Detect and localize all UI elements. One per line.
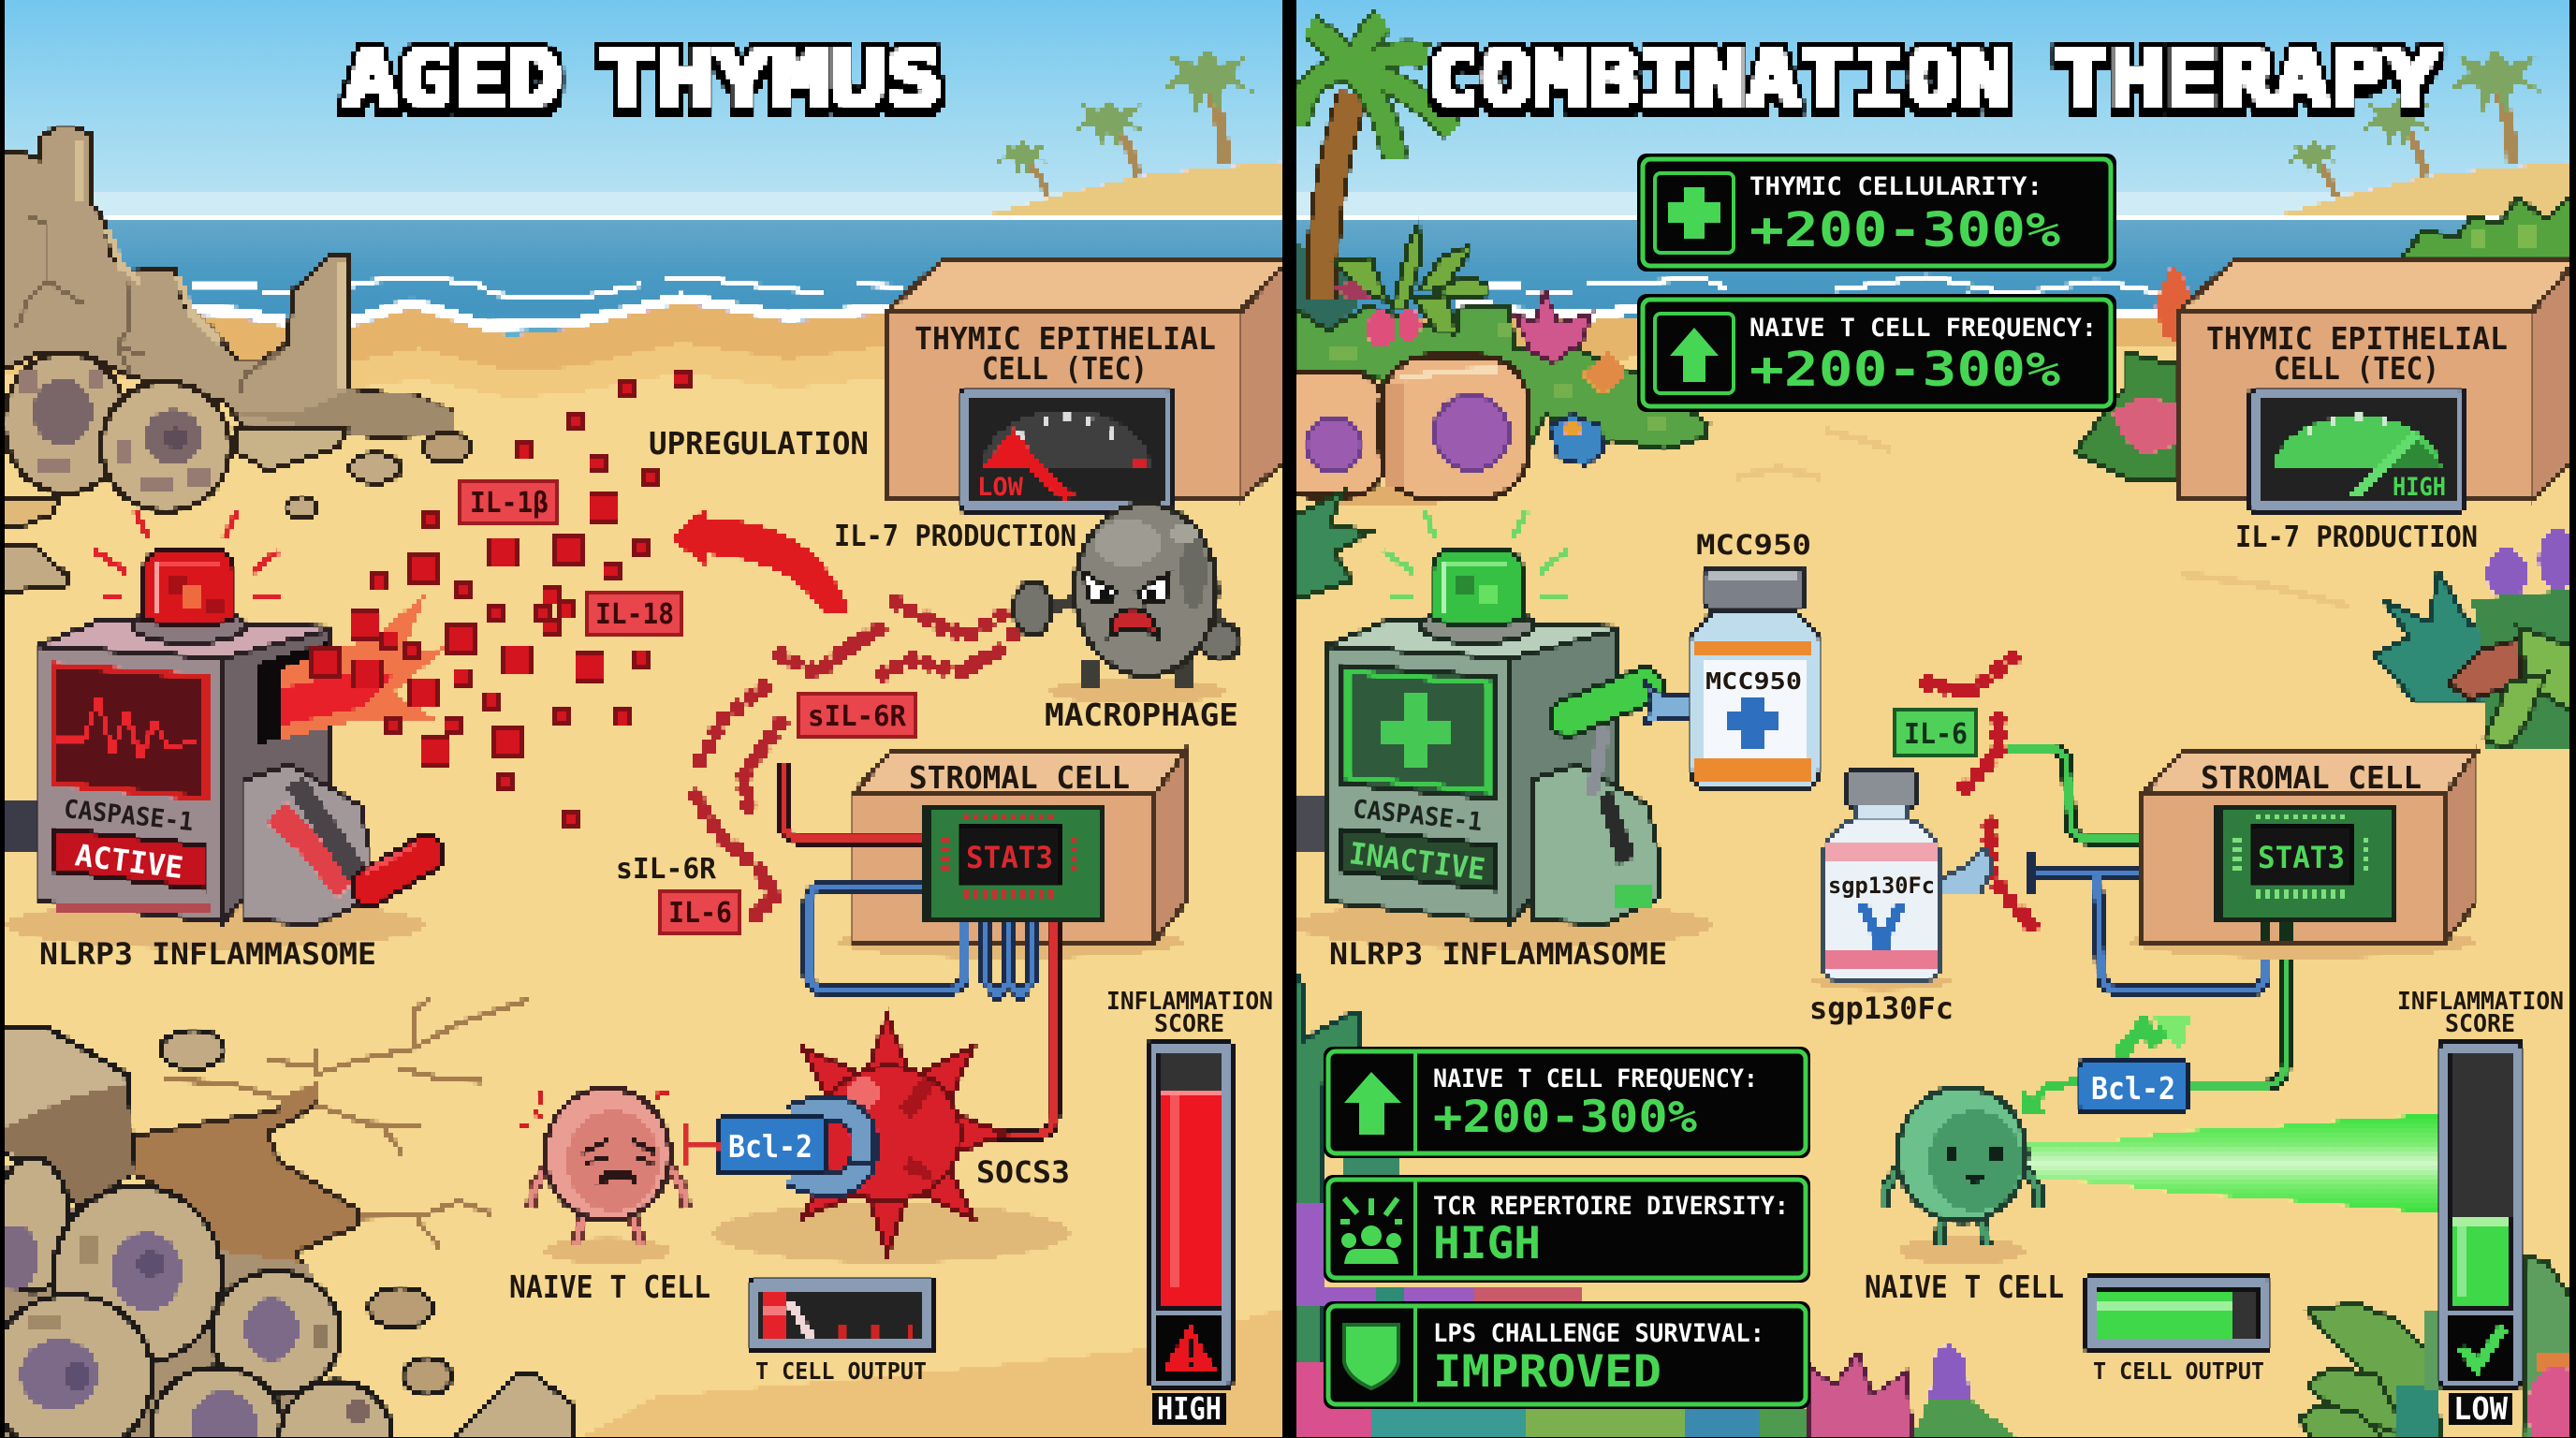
sea xyxy=(1288,220,2576,337)
foliage upper left xyxy=(1296,225,1708,465)
STAT3 circuit chip xyxy=(927,807,1104,920)
label: inflammation score: SCORE xyxy=(2445,1010,2515,1038)
sand xyxy=(0,309,1288,1438)
inflammation score bar high xyxy=(1148,1041,1232,1387)
result: TCR repertoire diversity xyxy=(1324,1175,1810,1283)
tag: IL-6: IL-6 xyxy=(668,897,732,930)
tag: sIL-6R xyxy=(798,694,915,737)
title: COMBINATION THERAPY: THERAPY xyxy=(2055,35,2440,124)
label: inflammation score: INFLAMMATION xyxy=(1106,988,1273,1016)
label: vial MCC950: MCC950 xyxy=(1705,668,1802,695)
label: naive T cell: NAIVE T CELL xyxy=(1865,1269,2064,1305)
curved red upregulation arrow xyxy=(669,506,850,615)
label: stromal cell: STROMAL CELL xyxy=(909,759,1130,796)
Bcl-2 badge xyxy=(2078,1061,2188,1113)
stromal cell box xyxy=(2130,752,2476,959)
title: AGED THYMUS: AGED xyxy=(344,35,562,124)
label: score low: LOW xyxy=(2453,1390,2508,1427)
healthy epithelial cells xyxy=(1273,356,1529,507)
foliage bottom right xyxy=(2298,1257,2576,1438)
label: caspase-1: CASPASE-1 xyxy=(63,795,195,837)
label: STAT3: STAT3 xyxy=(2258,840,2345,875)
title: AGED THYMUS: THYMUS xyxy=(598,35,944,124)
siren: red alarm xyxy=(95,510,279,643)
result: naive T cell frequency: NAIVE T CELL FREQUENCY: xyxy=(1749,314,2097,343)
label: Bcl-2: Bcl-2 xyxy=(728,1128,812,1165)
label: SOCS3: SOCS3 xyxy=(976,1154,1070,1190)
label: NLRP3 inflammasome: NLRP3 INFLAMMASOME xyxy=(39,936,376,972)
machine: NLRP3 inflammasome inactive xyxy=(1293,621,1714,949)
sand xyxy=(1288,309,2576,1438)
SOCS3 spiky ball xyxy=(712,1015,1070,1263)
label: inflammation score: SCORE xyxy=(1154,1010,1224,1038)
label: T cell output: T CELL OUTPUT xyxy=(2093,1357,2264,1385)
tag: IL-1 beta xyxy=(460,481,557,523)
stromal cell box xyxy=(838,752,1185,959)
label: MCC950: MCC950 xyxy=(1696,529,1811,561)
panel: aged thymus xyxy=(0,0,1288,1438)
siren: green calm xyxy=(1383,510,1567,643)
illustration layer: aged thymus beach scene xyxy=(0,0,1288,1438)
label: IL-7 production: IL-7 PRODUCTION xyxy=(2235,521,2478,554)
result: naive T cell frequency xyxy=(1637,294,2116,412)
cytokine particles xyxy=(311,371,689,827)
foliage upper right xyxy=(2074,197,2576,481)
ruined rocks xyxy=(0,126,452,437)
green T cell output beam xyxy=(2027,1114,2437,1213)
illustration layer: therapy beach scene xyxy=(1273,0,2576,1438)
label: T cell output: T CELL OUTPUT xyxy=(755,1357,927,1385)
label: Bcl-2: Bcl-2 xyxy=(2091,1070,2175,1107)
scattered stones lower xyxy=(161,1030,573,1438)
result: naive T cell frequency: +200-300% xyxy=(1749,343,2060,398)
result: TCR repertoire diversity: HIGH xyxy=(1433,1218,1541,1269)
TEC box xyxy=(2179,261,2576,500)
tag: IL-6 xyxy=(1895,710,1976,756)
panel: combination therapy xyxy=(1273,0,2576,1438)
result: thymic cellularity xyxy=(1637,154,2116,271)
tag: IL-6: IL-6 xyxy=(1904,718,1968,751)
result: LPS challenge survival xyxy=(1324,1301,1810,1409)
IL-6 bead chains neutralised xyxy=(1920,650,2040,933)
wiring: red and blue signalling wires xyxy=(784,763,1054,1135)
label: upregulation: UPREGULATION xyxy=(649,425,869,462)
result: LPS challenge survival: LPS CHALLENGE SURVIVAL: xyxy=(1433,1319,1764,1348)
label: thymic epithelial cell: THYMIC EPITHELIAL xyxy=(915,320,1216,357)
naive T cell (happy) xyxy=(1885,1087,2039,1265)
green arrows from Bcl-2 xyxy=(2020,1016,2190,1116)
sea xyxy=(0,220,1288,337)
tag: IL-18 xyxy=(587,593,681,635)
sky xyxy=(0,0,1288,217)
IL-6 bead chains xyxy=(688,594,1020,924)
result: thymic cellularity: THYMIC CELLULARITY: xyxy=(1749,172,2042,201)
fern left xyxy=(1296,492,1371,599)
lower left ground cracks xyxy=(134,999,531,1289)
label: IL-7 production: IL-7 PRODUCTION xyxy=(834,520,1076,553)
scattered stones upper xyxy=(0,429,471,594)
result: naive T cell frequency lower xyxy=(1324,1047,1810,1158)
machine: NLRP3 inflammasome active xyxy=(5,621,426,949)
foliage lower left xyxy=(1296,974,2019,1438)
label: active: ACTIVE xyxy=(73,837,185,886)
label: inflammation score: INFLAMMATION xyxy=(2397,988,2564,1016)
vial: MCC950 xyxy=(1690,569,1821,789)
inflammation score bar low xyxy=(2438,1041,2523,1387)
distant island with palm trees xyxy=(977,48,1288,217)
gauge: IL-7 high xyxy=(2250,389,2465,511)
tag: sIL-6R: sIL-6R xyxy=(808,700,907,733)
result: LPS challenge survival: IMPROVED xyxy=(1433,1346,1661,1398)
tag: IL-6 xyxy=(660,891,739,933)
label: gauge high: HIGH xyxy=(2393,473,2446,502)
label: macrophage: MACROPHAGE xyxy=(1045,697,1238,733)
degraded cells upper xyxy=(4,353,230,511)
result: naive T cell frequency lower: NAIVE T CELL FREQUENCY: xyxy=(1433,1064,1758,1093)
foliage right middle xyxy=(2372,528,2576,749)
label: gauge low: LOW xyxy=(977,473,1024,502)
Bcl-2 clamp xyxy=(686,1108,872,1184)
result: naive T cell frequency lower: +200-300% xyxy=(1433,1092,1697,1143)
T cell output gauge xyxy=(2086,1276,2270,1351)
vial: sgp130Fc xyxy=(1811,771,1994,990)
label: thymic epithelial cell: CELL (TEC) xyxy=(982,350,1148,387)
result: thymic cellularity: +200-300% xyxy=(1749,203,2060,258)
label: thymic epithelial cell: THYMIC EPITHELIAL xyxy=(2206,320,2508,357)
TEC box xyxy=(887,261,1288,500)
tag: IL-1 beta: IL-1β xyxy=(470,487,549,520)
distant island with palm trees xyxy=(2270,48,2576,217)
title: COMBINATION THERAPY: COMBINATION xyxy=(1427,35,2012,124)
label: caspase-1: CASPASE-1 xyxy=(1352,795,1484,837)
label: NLRP3 inflammasome: NLRP3 INFLAMMASOME xyxy=(1329,936,1667,972)
tag: IL-18: IL-18 xyxy=(595,598,674,631)
sky xyxy=(1288,0,2576,217)
label: naive T cell: NAIVE T CELL xyxy=(509,1269,710,1305)
label: sIL-6R: sIL-6R xyxy=(616,853,717,886)
label: inactive: INACTIVE xyxy=(1347,835,1487,888)
label: vial sgp130Fc: sgp130Fc xyxy=(1828,873,1935,899)
label: score high: HIGH xyxy=(1157,1390,1222,1427)
naive T cell (sad) xyxy=(522,1088,685,1264)
macrophage xyxy=(1014,504,1240,704)
label: STAT3: STAT3 xyxy=(966,840,1053,875)
rocky cells lower left xyxy=(0,1027,393,1438)
gauge: IL-7 low xyxy=(959,389,1173,511)
wiring: green and blue signalling wires xyxy=(2007,749,2286,1086)
label: thymic epithelial cell: CELL (TEC) xyxy=(2274,350,2439,387)
red burst from inflammasome xyxy=(281,592,449,740)
label: sgp130Fc: sgp130Fc xyxy=(1809,990,1954,1026)
result: TCR repertoire diversity: TCR REPERTOIRE DIVERSITY: xyxy=(1433,1192,1789,1221)
STAT3 circuit chip xyxy=(2218,807,2395,920)
label: stromal cell: STROMAL CELL xyxy=(2201,759,2422,796)
T cell output gauge xyxy=(749,1278,935,1352)
big palm tree xyxy=(1296,21,1453,330)
